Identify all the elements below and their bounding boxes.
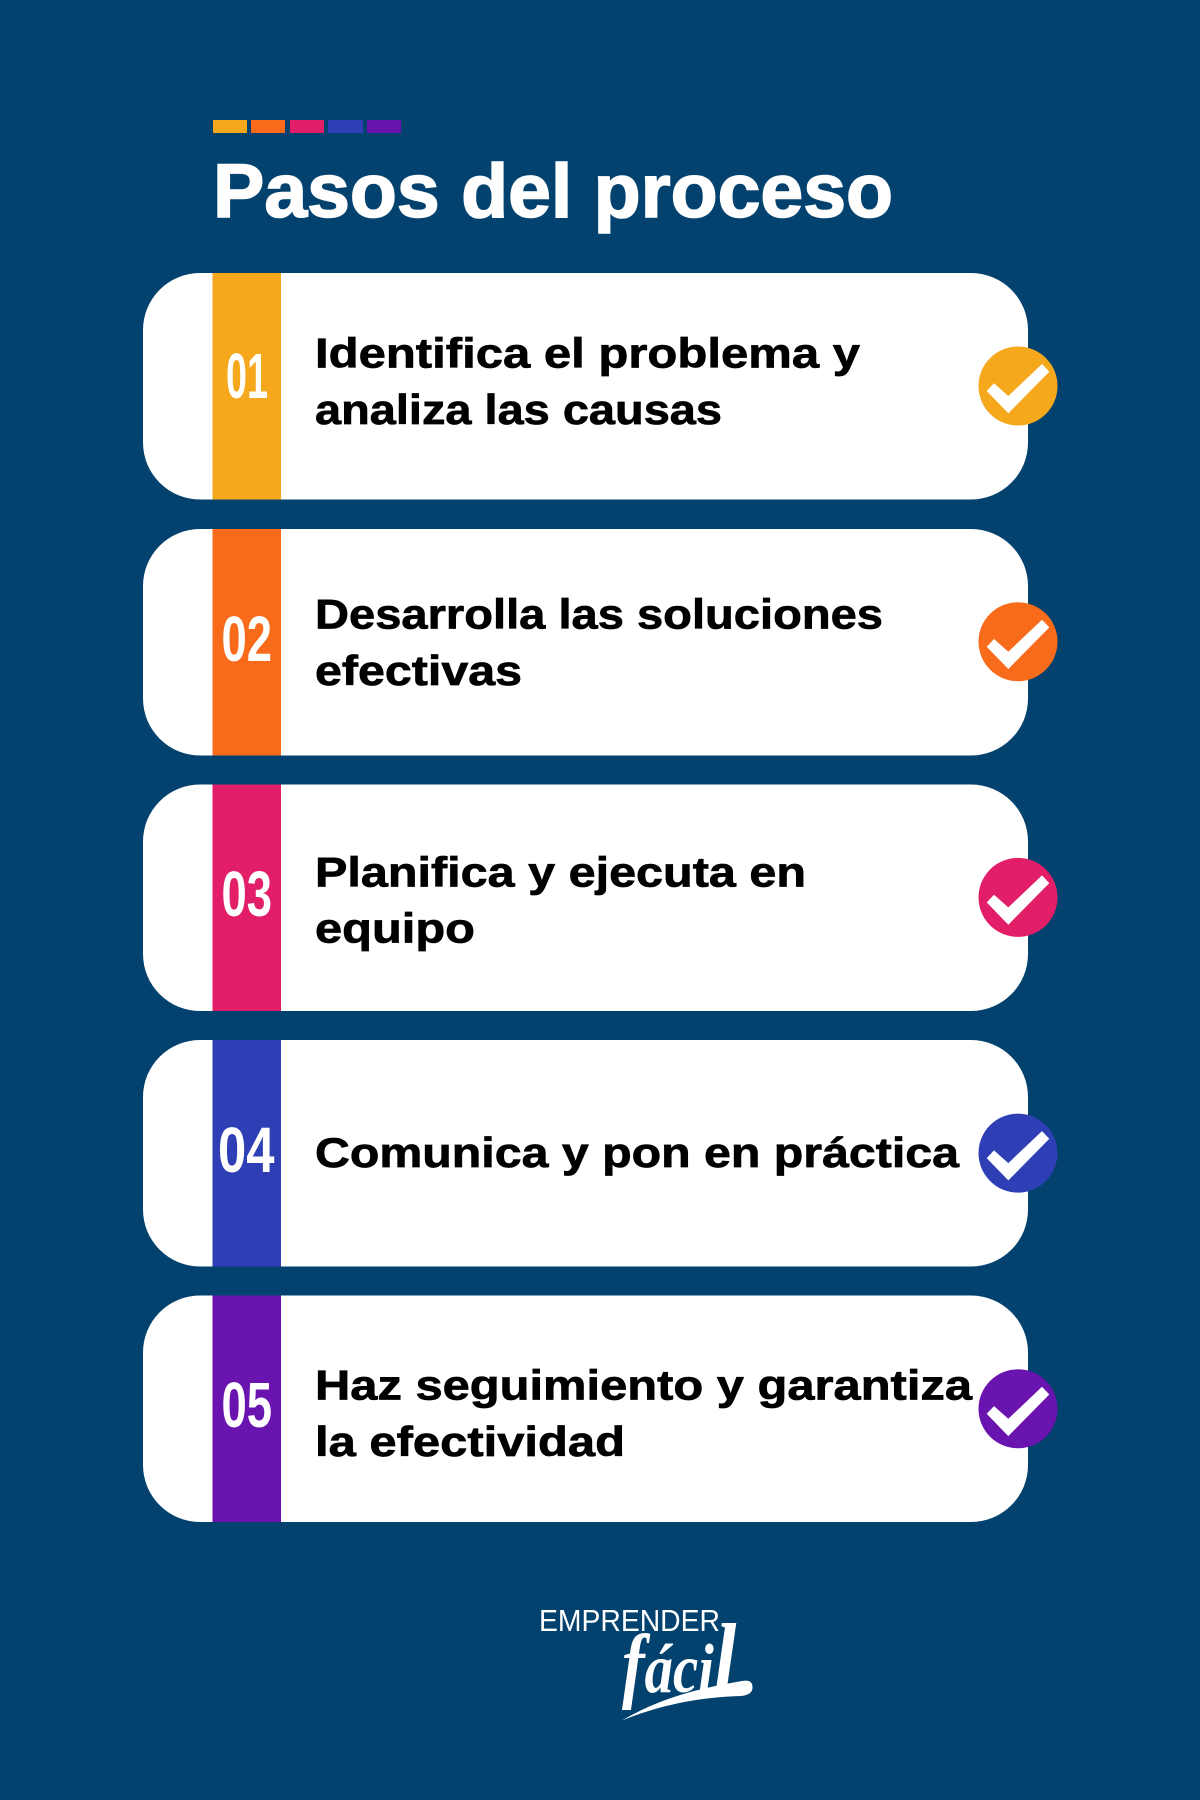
colour bars above title — [213, 120, 401, 133]
step text 01: Identifica el problema y — [315, 330, 861, 376]
step number 04: 04 — [218, 1114, 275, 1186]
step text 05: la efectividad — [315, 1418, 625, 1465]
step text 05 — [315, 1362, 973, 1465]
panel: step 05 — [143, 1296, 1058, 1522]
logo: Emprender Fácil — [539, 1603, 753, 1720]
icon: check 03 — [978, 858, 1058, 937]
panel: step 02 — [143, 529, 1058, 756]
step text 02: efectivas — [315, 647, 522, 694]
step text 04: Comunica y pon en práctica — [315, 1129, 960, 1176]
panel: step 04 — [143, 1040, 1058, 1266]
logo: Emprender Fácil: EMPRENDER — [539, 1603, 720, 1638]
icon: check 04 — [978, 1114, 1058, 1193]
icon: check 02 — [978, 602, 1058, 681]
step text 01: analiza las causas — [315, 386, 722, 433]
panel: step 03 — [143, 784, 1058, 1011]
step number 01: 01 — [226, 340, 268, 412]
icon: check 05 — [978, 1369, 1058, 1448]
step number 02: 02 — [222, 603, 272, 675]
step text 03: Planifica y ejecuta en — [315, 848, 806, 896]
title: Pasos del proceso — [213, 149, 893, 234]
logo: Emprender Fácil: fácil — [622, 1603, 737, 1714]
step text 02: Desarrolla las soluciones — [315, 590, 883, 638]
step number 03: 03 — [222, 858, 272, 930]
icon: check 01 — [978, 346, 1058, 426]
step text 03: equipo — [315, 904, 475, 952]
step text 01 — [315, 330, 861, 433]
step number 05: 05 — [222, 1369, 272, 1441]
step text 02 — [315, 590, 883, 694]
step text 05: Haz seguimiento y garantiza — [315, 1362, 973, 1408]
step text 03 — [315, 848, 806, 952]
panel: step 01 — [143, 273, 1058, 500]
